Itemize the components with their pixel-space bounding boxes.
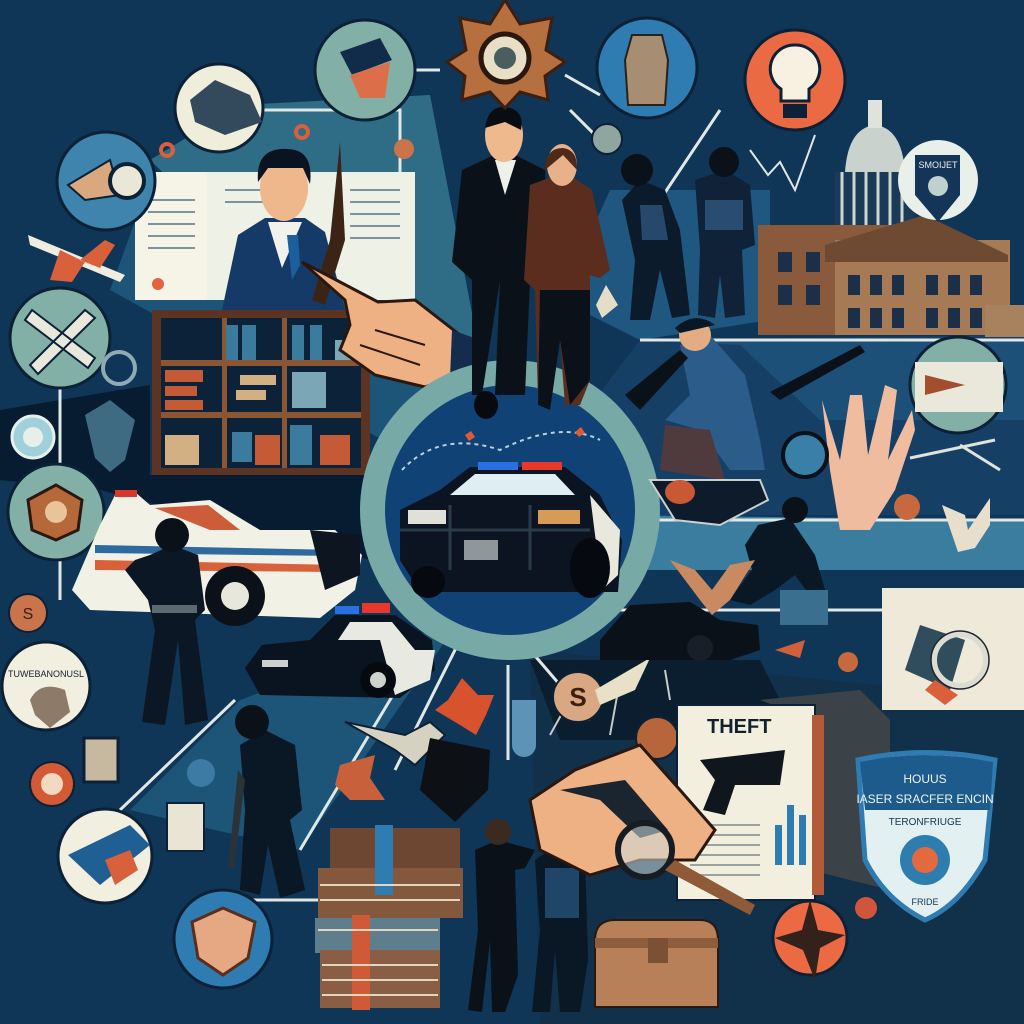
- icon: small red tag: [775, 640, 805, 658]
- panel: open book: [135, 172, 415, 300]
- black and white police car: [245, 603, 435, 698]
- man in suit: [452, 107, 550, 419]
- icon: baton: [770, 345, 865, 400]
- white police car: [72, 490, 362, 626]
- icon: ninja star: [773, 900, 847, 980]
- icon: crossed tools: [10, 288, 110, 388]
- icon: coin: [9, 594, 47, 632]
- icon: coin top: [394, 139, 414, 159]
- icon: airplane: [28, 235, 125, 282]
- panel: bookshelf: [152, 310, 370, 475]
- icon: coin: S: [23, 606, 33, 623]
- icon: sheriff star badge: [447, 0, 565, 108]
- icon: stopwatch: [783, 433, 827, 477]
- icon: rock: [175, 64, 263, 152]
- swat officer running: [730, 497, 828, 625]
- icon: silver badge: [85, 400, 135, 472]
- icon: sleeping figure: [58, 809, 152, 903]
- icon: car wreck: [650, 480, 768, 525]
- police shield emblem: IASER SRACFER ENCIN: [856, 792, 994, 806]
- swat officers: [621, 147, 755, 320]
- icon: torn paper: [910, 337, 1006, 433]
- icon: copper coin: [894, 494, 920, 520]
- police shield emblem: [856, 752, 995, 920]
- icon: grey ring left: [103, 352, 135, 384]
- icon: clipboard: [167, 803, 204, 851]
- swat officer with rifle: [228, 705, 305, 898]
- officer kneeling: [660, 318, 765, 480]
- panel: dark folder: [760, 690, 890, 890]
- stack of money: [315, 825, 463, 1010]
- icon: rings top left: [161, 126, 308, 156]
- icon: coin and wings: S: [569, 682, 587, 712]
- icon: second baton: [625, 350, 688, 410]
- icon: small orange flower: [855, 897, 877, 919]
- icon: officer cap: [315, 20, 415, 120]
- capitol building: [758, 100, 1024, 337]
- icon: police shield top right: SMOIJET: [918, 160, 958, 170]
- woman in suit: [524, 144, 618, 410]
- police shield emblem: FRIDE: [912, 897, 938, 907]
- icon: copper shield circle: [174, 890, 272, 988]
- panel: theft newspaper: THEFT: [707, 716, 771, 738]
- icon: coin and wings: [512, 658, 678, 759]
- black sedan: [600, 602, 760, 661]
- police officer standing: [125, 518, 208, 725]
- icon: light bulb: [745, 30, 845, 130]
- central circle ring: [360, 360, 660, 660]
- line chart: [750, 135, 815, 190]
- icon: bear: [597, 18, 697, 118]
- icon: pistol with cloth: [345, 722, 490, 822]
- panel: theft newspaper: [677, 705, 824, 900]
- icon: blue burst: [187, 759, 215, 787]
- hand with magnifier: [530, 745, 755, 915]
- icon: bronze badge: [8, 464, 104, 560]
- icon: gear top: [592, 124, 622, 154]
- two figures shaking hands: [468, 819, 588, 1012]
- icon: maple leaf: [435, 678, 494, 735]
- icon: small target: [12, 416, 54, 458]
- icon: orange coin: [838, 652, 858, 672]
- panel: handcuffs on document: [882, 588, 1024, 710]
- icon: wooden box: [595, 920, 718, 1007]
- police shield emblem: TERONFRIUGE: [889, 817, 962, 828]
- icon: labelled circle: [2, 642, 90, 730]
- agent with rifle: [222, 142, 345, 310]
- icon: burst leaves: [335, 755, 385, 800]
- icon: butterfly: [942, 498, 990, 552]
- icon: orange round: [30, 762, 74, 806]
- icon: square frame: [84, 738, 118, 782]
- icon: camera tool: [57, 132, 155, 230]
- pointing hand: [302, 262, 480, 387]
- icon: syringe: [910, 440, 1000, 470]
- icon: open hand: [822, 385, 915, 530]
- icon: winged emblem: [670, 560, 755, 615]
- police shield emblem: HOUUS: [903, 772, 947, 786]
- icon: labelled circle: TUWEBANONUSL: [8, 669, 84, 679]
- icon: police shield top right: [898, 140, 978, 222]
- central police car: [400, 462, 622, 598]
